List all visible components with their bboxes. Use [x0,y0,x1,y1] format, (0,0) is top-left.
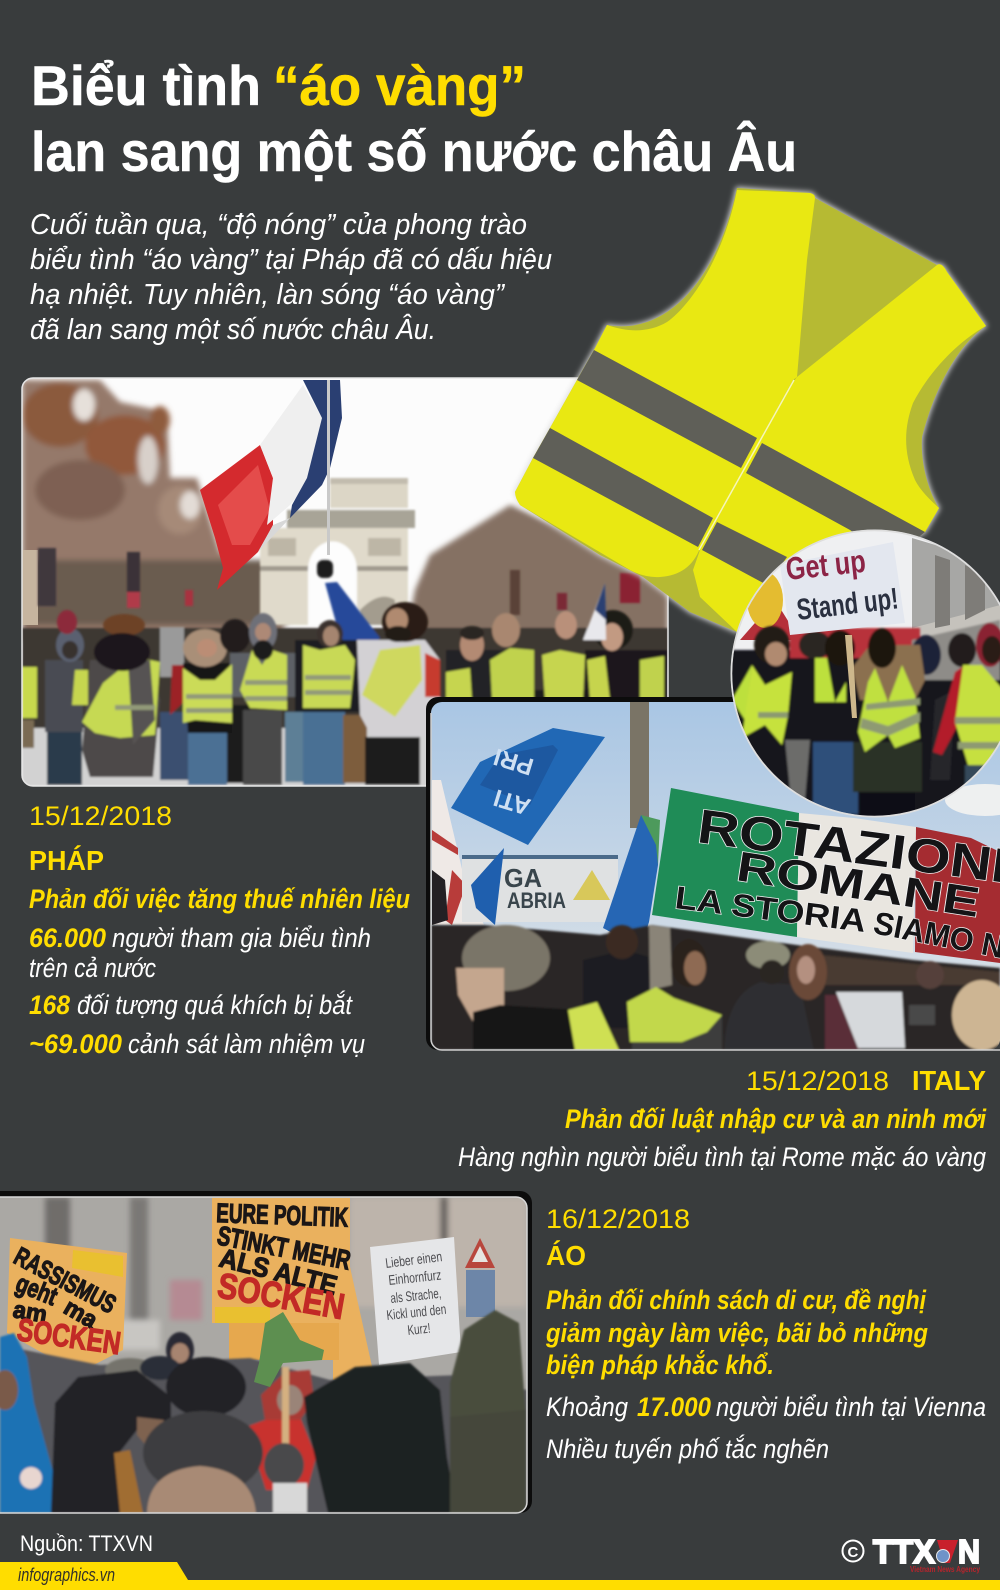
title: lan sang một số nước châu Âu [31,120,797,183]
photo: Italy protest in Rome: ABRIA [507,888,566,913]
text block: Italy [458,1065,986,1172]
text block: Austria: 17.000 [637,1392,711,1422]
photo: Austria protest in Vienna: Lieber einen [384,1248,443,1271]
text block: France: Phản đối việc tăng thuế nhiên liệu [29,884,410,914]
text block: France: 15/12/2018 [29,801,172,831]
intro text: đã lan sang một số nước châu Âu. [30,313,436,346]
photo: Italy protest in Rome [431,702,1000,1050]
text block: France: ~69.000 [29,1029,122,1059]
text block: France: PHÁP [29,845,104,876]
photo 3 shadow [0,1191,532,1513]
photo: Austria protest in Vienna: Kurz! [407,1320,431,1338]
photo: Italy protest shadow [426,697,1000,1050]
text block: Austria [545,1204,986,1464]
photo 1 border [22,378,668,786]
text block: Italy: ITALY [912,1065,986,1096]
photo: Austria protest in Vienna: RASSISMUS [9,1241,121,1319]
text block: France [29,801,410,1059]
photo: Austria protest in Vienna: Kickl und den [386,1301,447,1323]
photo 2 border [431,713,1000,1050]
website label: infographics.vn [18,1565,115,1585]
title [31,54,797,183]
text block: Austria: biện pháp khắc khổ. [546,1349,774,1380]
intro text: hạ nhiệt. Tuy nhiên, làn sóng “áo vàng” [30,279,505,311]
photo: Austria protest in Vienna: EURE POLITIK [216,1198,349,1233]
text block: Italy: 15/12/2018 [746,1066,889,1096]
text block: France: người tham gia biểu tình [112,923,371,953]
text block: Austria: ÁO [546,1240,586,1271]
logo: TTXVN [842,1533,980,1574]
photo: France protest at Arc de Triomphe [22,378,668,786]
text block: France: cảnh sát làm nhiệm vụ [128,1029,365,1059]
logo: TTXVN: TTX [873,1533,935,1570]
photo: Austria protest in Vienna: SOCKEN [15,1311,123,1361]
photo: Austria protest in Vienna [0,1197,527,1513]
photo: Austria protest in Vienna: ALS ALTE [217,1243,340,1301]
text block: France: đối tượng quá khích bị bắt [77,989,353,1020]
photo: Italy protest in Rome: LA STORIA [673,879,868,939]
photo: Italy protest in Rome: ROTAZIONI [695,800,1000,894]
text block: France: trên cả nước [29,953,156,983]
photo: Austria protest in Vienna: am [11,1296,49,1329]
logo: TTXVN: Vietnam News Agency [910,1565,980,1574]
title: Biểu tình [31,54,261,117]
photo: Austria protest in Vienna: SOCKEN [215,1265,348,1327]
photo: Italy protest in Rome: ROMANE [734,842,983,926]
text block: Austria: 16/12/2018 [546,1204,690,1234]
photo: Austria protest in Vienna: STINKT MEHR [215,1220,353,1276]
icon: yellow safety vest [515,188,986,640]
footer yellow bar [0,1562,1000,1590]
logo: TTXVN: N [958,1533,980,1570]
intro text: biểu tình “áo vàng” tại Pháp đã có dấu hiệu [30,244,552,276]
text block: France: 66.000 [29,923,106,953]
text block: Austria: Khoảng [546,1392,628,1422]
photo: Italy protest in Rome: ATI [491,783,534,820]
text block: France: 168 [29,990,70,1020]
intro text: Cuối tuần qua, “độ nóng” của phong trào [30,209,527,241]
logo: TTXVN: C [848,1544,858,1561]
text block: Austria: giảm ngày làm việc, bãi bỏ những [545,1318,928,1348]
photo: circle inset, Get up Stand up [730,530,1000,820]
title: “áo vàng” [273,54,526,117]
photo: Italy protest in Rome: PRI [491,743,537,780]
photo: circle inset, Get up Stand up: Get up [784,543,867,587]
photo: Austria protest in Vienna: als Strache, [390,1285,442,1306]
photo: Austria protest in Vienna: Einhornfurz [388,1267,442,1288]
source: Nguồn: TTXVN [20,1531,153,1556]
intro text [30,209,552,346]
photo 3 border [0,1197,527,1513]
photo: Italy protest in Rome: GA [504,863,542,893]
photo: Austria protest in Vienna: geht [12,1268,62,1311]
photo: Austria protest in Vienna: ma [59,1294,102,1335]
photo: circle inset, Get up Stand up: Stand up! [795,582,900,627]
text block: Austria: Phản đối chính sách di cư, đề nghị [546,1285,926,1315]
text block: Austria: Nhiều tuyến phố tắc nghẽn [546,1433,829,1464]
